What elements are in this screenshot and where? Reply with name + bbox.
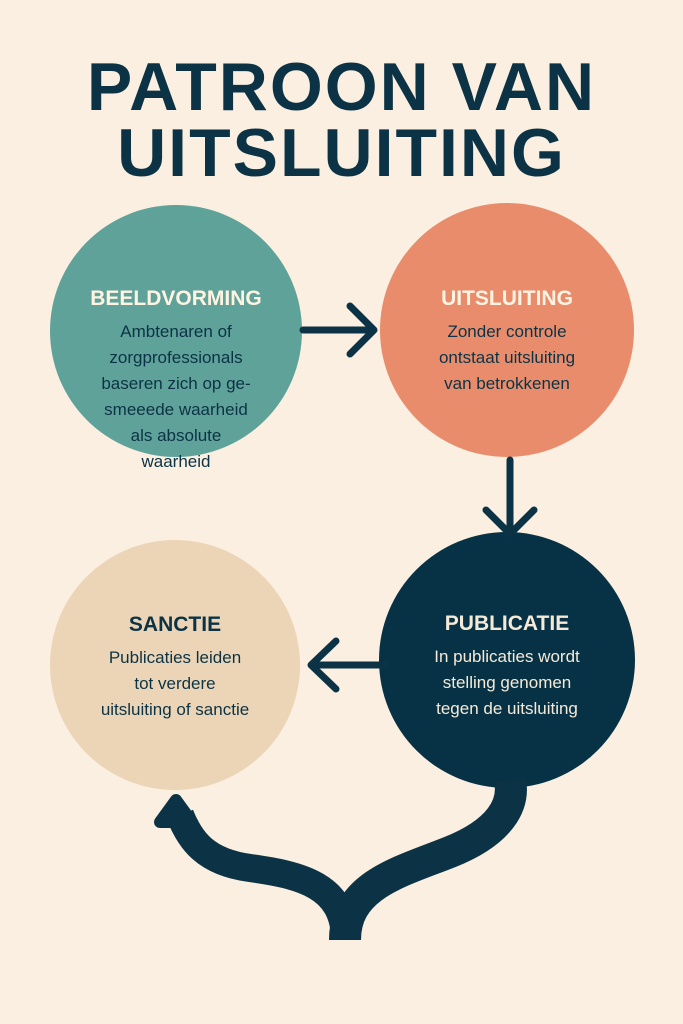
- arrow: right: [303, 306, 374, 354]
- panel: publicatie: [379, 532, 635, 788]
- title: UITSLUITING: [117, 115, 566, 191]
- panel: beeldvorming: zorgprofessionals: [109, 348, 243, 367]
- panel: uitsluiting: UITSLUITING: [441, 287, 573, 310]
- title: [87, 49, 596, 191]
- panel: uitsluiting: Zonder controle: [447, 322, 567, 341]
- panel: beeldvorming: als absolute: [131, 426, 221, 445]
- panel: publicatie: stelling genomen: [443, 673, 571, 692]
- arrow: loop back: [160, 780, 511, 940]
- panel: sanctie: SANCTIE: [129, 613, 221, 636]
- panel: beeldvorming: [50, 205, 302, 457]
- arrow: left: [311, 641, 385, 689]
- title: PATROON VAN: [87, 49, 596, 125]
- panel: beeldvorming: baseren zich op ge-: [101, 374, 251, 393]
- text: waarheid: [142, 452, 210, 471]
- panel: publicatie: tegen de uitsluiting: [436, 699, 578, 718]
- panel: beeldvorming: BEELDVORMING: [90, 287, 262, 310]
- panel: uitsluiting: [380, 203, 634, 457]
- arrow: down: [486, 460, 534, 534]
- panel: uitsluiting: van betrokkenen: [444, 374, 570, 393]
- panel: sanctie: Publicaties leiden: [109, 648, 241, 667]
- panel: beeldvorming: Ambtenaren of: [120, 322, 232, 341]
- panel: sanctie: tot verdere: [134, 674, 216, 693]
- panel: beeldvorming: smeeede waarheid: [104, 400, 248, 419]
- panel: sanctie: uitsluiting of sanctie: [101, 700, 249, 719]
- panel: publicatie: PUBLICATIE: [445, 612, 569, 635]
- panel: publicatie: In publicaties wordt: [434, 647, 580, 666]
- panel: sanctie: [50, 540, 300, 790]
- panel: uitsluiting: ontstaat uitsluiting: [439, 348, 575, 367]
